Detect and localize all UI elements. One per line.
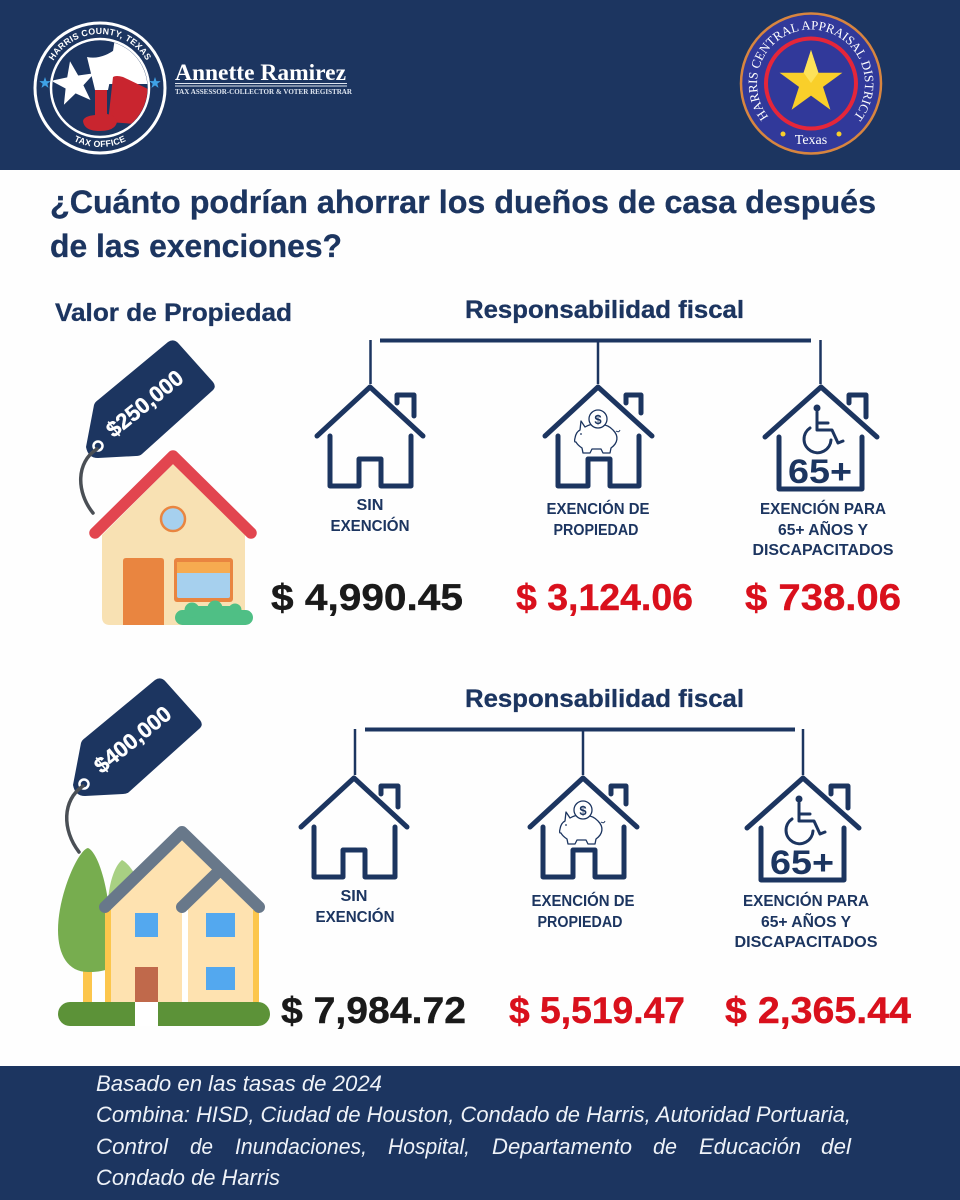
footer note: de (653, 1134, 677, 1159)
label: Exención de propiedad (row 2): PROPIEDAD (538, 914, 622, 931)
footer note: del (821, 1134, 852, 1159)
label: Exención de propiedad (row 2) (532, 892, 634, 931)
icon: house with wheelchair and 65+ (row 1) (765, 387, 877, 491)
icon: wheelchair (804, 404, 843, 453)
icon: two-story house with trees (58, 832, 270, 1026)
logo: Harris County Tax Office seal: HARRIS COUNTY, TEXAS (48, 28, 151, 60)
title: de las exenciones? (50, 228, 342, 264)
icon: wheelchair (786, 796, 825, 844)
title (50, 184, 876, 264)
label: Exención para 65+ (row 1): 65+ AÑOS Y (778, 521, 869, 539)
amount: sin exención 250k: $ 4,990.45 (271, 577, 463, 618)
icon: house with red roof (95, 456, 253, 625)
label: Exención para 65+ (row 1): EXENCIÓN PARA (760, 500, 886, 518)
label: Sin exención (row 1): EXENCIÓN (330, 517, 410, 535)
label: Exención para 65+ (row 2) (734, 892, 878, 951)
label: Exención para 65+ (row 1): DISCAPACITADOS (752, 542, 894, 559)
amount: exención 65+ 250k: $ 738.06 (745, 577, 901, 618)
icon: price tag $250,000: $250,000 (101, 365, 188, 442)
icon: house, no exemption (row 1) (317, 387, 423, 486)
label: Exención para 65+ (row 2): EXENCIÓN PARA (743, 892, 869, 910)
icon: price tag $400,000 (67, 678, 202, 852)
amount: exención de propiedad 400k: $ 5,519.47 (509, 990, 685, 1031)
icon: piggy bank: $ (579, 803, 587, 818)
logo: Harris Central Appraisal District seal: HARRIS CENTRAL APPRAISAL DISTRICT (748, 21, 874, 122)
bracket connector row 1 (370, 340, 820, 384)
amount: exención 65+ 400k: $ 2,365.44 (725, 990, 911, 1031)
footer band (0, 1066, 960, 1200)
icon: house, no exemption (row 2) (301, 778, 407, 877)
icon: house with wheelchair and 65+ (row 2): 65+ (770, 844, 834, 882)
label: Sin exención (row 2) (316, 888, 394, 926)
footer note: Departamento (492, 1134, 632, 1159)
label: Sin exención (row 2): EXENCIÓN (316, 908, 394, 926)
footer note: Educación (699, 1134, 801, 1159)
footer note: Hospital, (388, 1134, 470, 1159)
icon: house with piggy bank (row 1) (545, 387, 652, 486)
label: Sin exención (row 1) (330, 497, 410, 535)
label: Sin exención (row 1): SIN (356, 497, 384, 514)
label: Exención para 65+ (row 2): 65+ AÑOS Y (761, 913, 852, 931)
label: Sin exención (row 2): SIN (340, 888, 368, 905)
icon: house with piggy bank (row 2) (530, 778, 637, 877)
icon: house with wheelchair and 65+ (row 1): 65+ (788, 453, 852, 491)
icon: house with wheelchair and 65+ (row 2) (747, 778, 859, 882)
icon: price tag $400,000: $400,000 (89, 701, 176, 778)
heading: Responsabilidad fiscal (row 2): Responsabilidad fiscal (465, 685, 744, 713)
amount: exención de propiedad 250k: $ 3,124.06 (516, 577, 693, 618)
heading: Valor de Propiedad: Valor de Propiedad (55, 299, 292, 327)
footer note: Condado de Harris (96, 1165, 280, 1190)
title: ¿Cuánto podrían ahorrar los dueños de casa después (50, 184, 876, 220)
footer note: Inundaciones, (235, 1134, 367, 1159)
label: Exención de propiedad (row 1): PROPIEDAD (554, 522, 638, 539)
label: Exención para 65+ (row 1) (752, 500, 894, 559)
label: Exención para 65+ (row 2): DISCAPACITADOS (734, 934, 878, 951)
icon: piggy bank: $ (594, 412, 602, 427)
logo: Annette Ramirez wordmark: Annette Ramirez (175, 60, 346, 85)
footer note: Basado en las tasas de 2024 (96, 1071, 382, 1096)
logo: Annette Ramirez wordmark (175, 60, 353, 96)
footer note: de (190, 1134, 213, 1159)
heading: Responsabilidad fiscal (row 1): Responsabilidad fiscal (465, 296, 744, 324)
label: Exención de propiedad (row 2): EXENCIÓN DE (532, 892, 634, 910)
logo: Harris County Tax Office seal (34, 22, 166, 154)
logo: Harris Central Appraisal District seal (740, 12, 882, 155)
footer note (96, 1071, 852, 1190)
logo: Harris County Tax Office seal: TAX OFFICE (76, 135, 126, 147)
bracket connector row 2 (355, 729, 803, 775)
label: Exención de propiedad (row 1) (546, 500, 650, 539)
header band (0, 0, 960, 170)
icon: price tag $250,000 (81, 340, 215, 513)
footer note: Control (96, 1134, 169, 1159)
label: Exención de propiedad (row 1): EXENCIÓN DE (546, 500, 650, 518)
logo: Harris Central Appraisal District seal: Texas (795, 133, 827, 148)
footer note: Combina: HISD, Ciudad de Houston, Condado de Harris, Autoridad Portuaria, (96, 1102, 851, 1127)
logo: Annette Ramirez wordmark: TAX ASSESSOR-COLLECTOR & VOTER REGISTRAR (175, 88, 353, 96)
amount: sin exención 400k: $ 7,984.72 (281, 990, 466, 1031)
